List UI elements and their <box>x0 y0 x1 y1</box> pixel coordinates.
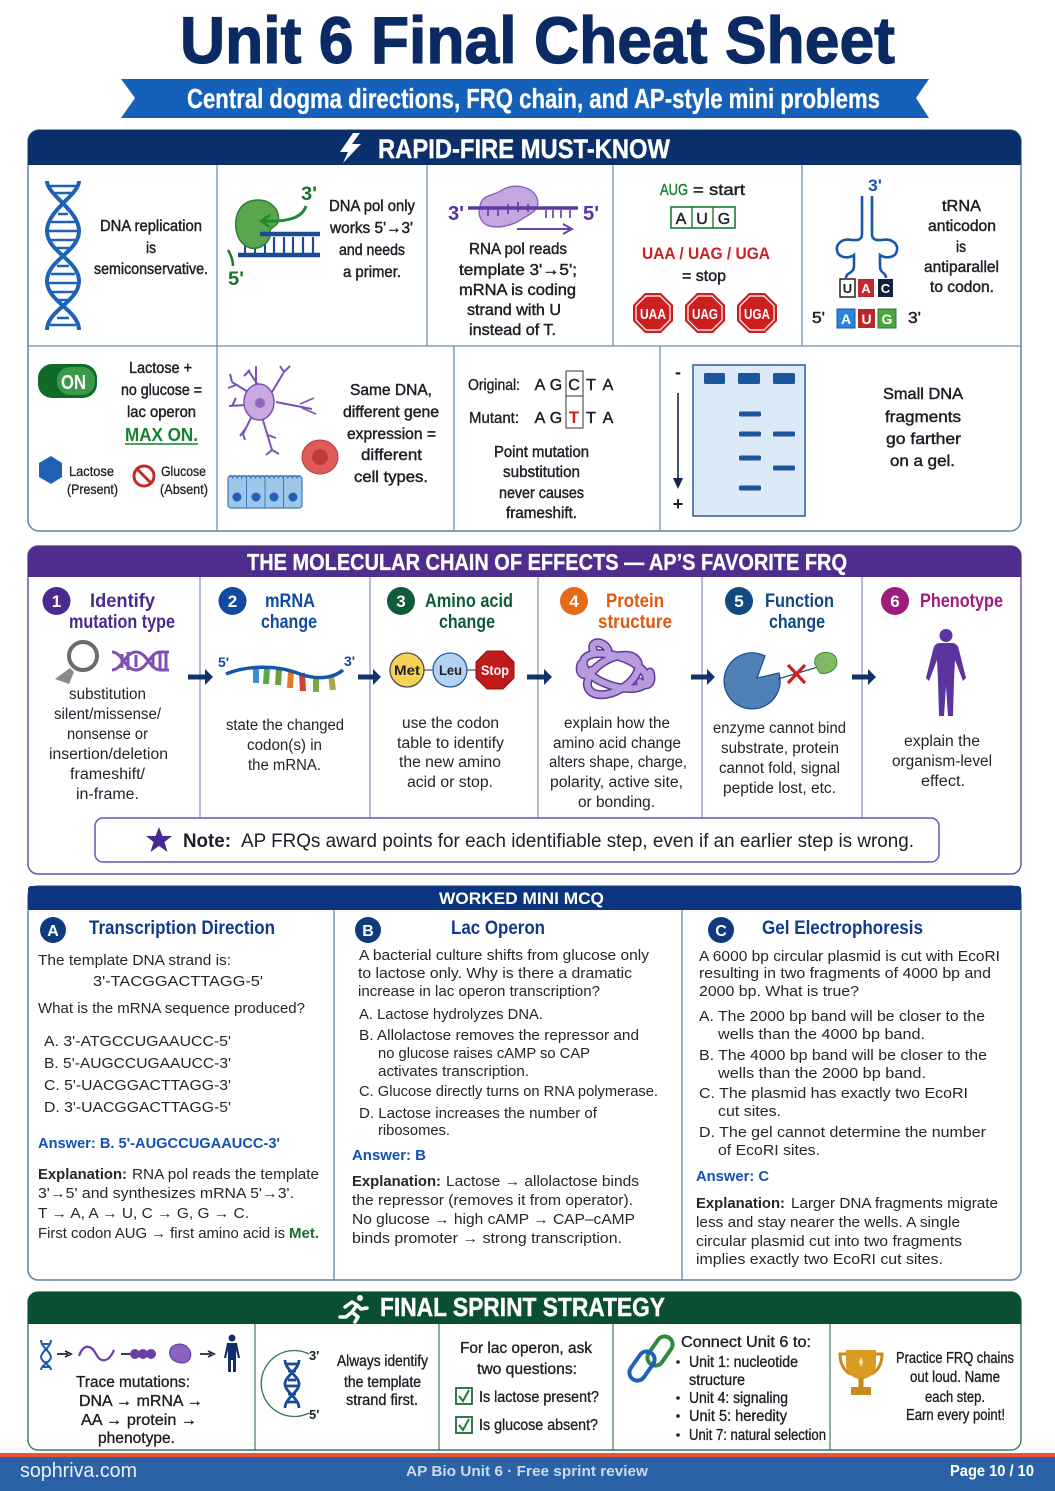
question B: lac operon: Explanation: <box>352 1174 441 1190</box>
question A: transcription direction: RNA pol reads the template <box>132 1167 319 1183</box>
panel: molecular chain of effects <box>28 546 1021 874</box>
question C: gel electrophoresis: Larger DNA fragments migrate <box>791 1196 998 1212</box>
arrow 2 <box>358 669 381 685</box>
icon: checkbox <box>456 1388 472 1404</box>
connect units cell: structure <box>689 1372 745 1389</box>
icon: cell types <box>228 366 338 508</box>
question A: transcription direction: Explanation: <box>38 1167 127 1183</box>
question C: gel electrophoresis <box>696 917 1000 1268</box>
text: RNA pol <box>459 241 577 339</box>
lactose present, glucose absent: (Absent) <box>160 481 208 497</box>
chain header <box>28 546 1021 577</box>
question B: lac operon: to lactose only. Why is there a dramatic <box>358 966 632 982</box>
icon: gel electrophoresis: - <box>675 362 681 382</box>
question C: gel electrophoresis: less and stay nearer the wells. A single <box>696 1215 960 1231</box>
icon: person <box>926 629 966 716</box>
step 4: protein structure: explain how the <box>564 715 670 732</box>
step 6: phenotype: effect. <box>921 773 965 790</box>
step 3: amino acid change: acid or stop. <box>407 774 493 791</box>
icon: DNA polymerase: 5' <box>228 269 244 290</box>
question A: transcription direction: D. 3'-UACGGACTTAGG-5' <box>44 1100 231 1116</box>
question C: gel electrophoresis: resulting in two fragments of 4000 bp and <box>699 966 991 982</box>
start and stop codons <box>633 182 777 333</box>
question A: transcription direction: Met. <box>289 1226 319 1242</box>
point mutation sequence comparison: G <box>550 377 562 394</box>
step 1: identify mutation type: nonsense or <box>67 726 148 743</box>
template strand cell: strand first. <box>346 1392 418 1409</box>
text: DNA pol <box>329 198 415 281</box>
question B: lac operon: B. Allolactose removes the repressor and <box>359 1028 639 1044</box>
text: lac operon: MAX ON. <box>125 425 198 445</box>
question C: gel electrophoresis: implies exactly two EcoRI cut sites. <box>696 1252 943 1268</box>
question C: gel electrophoresis: cut sites. <box>718 1104 781 1120</box>
chain header: THE MOLECULAR CHAIN OF EFFECTS — AP’S FAVORITE FRQ <box>247 549 847 575</box>
point mutation sequence comparison: C <box>568 377 580 394</box>
icon: DNA in ring <box>261 1348 319 1422</box>
text: DNA pol: DNA pol only <box>329 198 415 215</box>
icon: RNA polymerase: 3' <box>448 203 464 225</box>
icon: gel electrophoresis <box>673 362 805 516</box>
footer: Page 10 / 10 <box>950 1463 1034 1480</box>
step 5: function change: substrate, protein <box>721 740 839 757</box>
step 6: phenotype: Phenotype <box>920 591 1003 612</box>
icon: tRNA with codon: 3' <box>908 310 921 327</box>
question C: gel electrophoresis: circular plasmid cut into two fragments <box>696 1234 962 1250</box>
question B: lac operon: increase in lac operon transcription? <box>358 984 600 1000</box>
lac operon questions cell: two questions: <box>477 1361 577 1378</box>
connect units cell: Unit 4: signaling <box>689 1390 788 1407</box>
text: point mutation: frameshift. <box>506 505 577 522</box>
connect units cell: Unit 5: heredity <box>689 1408 787 1425</box>
trace mutations cell: phenotype. <box>98 1430 175 1447</box>
panel: rapid-fire must-know <box>28 130 1021 531</box>
arrow 5 <box>852 669 876 685</box>
icon: gel electrophoresis: + <box>673 494 683 514</box>
step 5: function change: peptide lost, etc. <box>723 780 836 797</box>
step 6: phenotype <box>881 587 1003 790</box>
icon: folded protein <box>579 643 651 703</box>
text: gene expression <box>343 382 439 486</box>
text: gene expression: Same DNA, <box>350 382 432 399</box>
template strand cell: the template <box>344 1374 421 1391</box>
text: gel: Small DNA <box>883 386 963 403</box>
arrow 4 <box>691 669 715 685</box>
text: tRNA: to codon. <box>930 279 994 296</box>
icon: tRNA with codon: A <box>861 281 871 296</box>
text: gene expression: expression = <box>347 426 436 443</box>
step 1: identify mutation type: Identify <box>90 591 155 612</box>
question C: gel electrophoresis: C <box>715 923 727 940</box>
question B: lac operon: A bacterial culture shifts from glucose only <box>359 948 650 964</box>
practice cell <box>840 1350 1014 1424</box>
question C: gel electrophoresis: C. The plasmid has exactly two EcoRI <box>699 1086 968 1102</box>
rapid-fire header <box>28 130 1021 165</box>
step 5: function change: change <box>769 612 825 633</box>
icon: DNA polymerase: 3' <box>301 184 317 205</box>
question A: transcription direction: The template DNA strand is: <box>38 953 231 969</box>
step 6: phenotype: organism-level <box>892 753 992 770</box>
step 2: mRNA change: change <box>261 612 317 633</box>
question C: gel electrophoresis: Gel Electrophoresis <box>762 918 923 939</box>
sprint header: FINAL SPRINT STRATEGY <box>380 1292 665 1322</box>
icon: mRNA strand <box>218 653 355 692</box>
question B: lac operon: Lac Operon <box>451 918 545 939</box>
subtitle ribbon: Central dogma directions, FRQ chain, and AP-style mini problems <box>187 83 880 114</box>
point mutation sequence comparison: T <box>586 410 596 427</box>
lactose present, glucose absent <box>39 456 208 497</box>
lactose present, glucose absent: Lactose <box>69 463 114 479</box>
text: replication: semiconservative. <box>94 261 208 278</box>
text: tRNA: tRNA <box>942 198 981 215</box>
stop signs: UAA <box>640 306 666 323</box>
panel: final sprint strategy <box>28 1292 1021 1450</box>
question B: lac operon: ribosomes. <box>378 1123 450 1139</box>
step 6: phenotype: 6 <box>890 592 900 611</box>
icon: tRNA with codon: 5' <box>812 310 825 327</box>
step 2: mRNA change <box>218 587 355 774</box>
text: gene expression: different <box>361 447 423 464</box>
question A: transcription direction <box>38 917 319 1242</box>
question A: transcription direction: First codon AUG → first amino acid is <box>38 1226 285 1242</box>
icon: tRNA with codon: 3' <box>868 176 882 195</box>
step 2: mRNA change: mRNA <box>265 591 315 612</box>
step 2: mRNA change: state the changed <box>226 717 344 734</box>
question B: lac operon: no glucose raises cAMP so CAP <box>378 1046 590 1062</box>
stop signs <box>633 293 777 333</box>
point mutation sequence comparison <box>468 371 614 428</box>
question B: lac operon: the repressor (removes it from operator). <box>352 1193 633 1209</box>
icon: RNA polymerase <box>448 186 599 234</box>
text: gene expression: cell types. <box>354 469 428 486</box>
point mutation sequence comparison: A <box>535 377 546 394</box>
text: gel: go farther <box>886 431 962 448</box>
step 4: protein structure: Protein <box>606 591 664 612</box>
icon: DNA helix <box>47 181 79 330</box>
note callout <box>95 818 939 862</box>
step 1: identify mutation type: insertion/deletion <box>49 746 168 763</box>
step 1: identify mutation type: mutation type <box>69 612 175 633</box>
question A: transcription direction: A <box>47 923 59 940</box>
text: tRNA: anticodon <box>928 218 996 235</box>
practice cell: each step. <box>925 1389 985 1406</box>
text: replication <box>94 218 208 278</box>
icon: DNA polymerase <box>228 184 320 290</box>
start and stop codons: UAA / UAG / UGA <box>642 244 770 263</box>
point mutation sequence comparison: T <box>569 408 580 427</box>
question C: gel electrophoresis: D. The gel cannot determine the number <box>699 1125 986 1141</box>
step 5: function change <box>713 587 846 797</box>
text: point mutation: never causes <box>499 485 584 502</box>
step 4: protein structure: polarity, active site, <box>550 774 683 791</box>
step 5: function change: 5 <box>734 592 744 611</box>
AUG codon boxes <box>671 207 735 228</box>
template strand cell: Always identify <box>337 1353 428 1370</box>
question C: gel electrophoresis: wells than the 2000 bp band. <box>717 1066 926 1082</box>
text: replication: is <box>146 240 156 257</box>
footer <box>0 1453 1055 1491</box>
point mutation sequence comparison: A <box>603 410 614 427</box>
step 2: mRNA change: codon(s) in <box>247 737 322 754</box>
text: point mutation: Point mutation <box>494 444 589 461</box>
rapid-fire header: RAPID-FIRE MUST-KNOW <box>378 134 670 164</box>
step 3: amino acid change: Amino acid <box>425 591 513 612</box>
icon: RNA polymerase: 5' <box>583 203 599 225</box>
step 5: function change: cannot fold, signal <box>719 760 840 777</box>
question A: transcription direction: T → A, A → U, C → G, G → C. <box>38 1206 249 1222</box>
question B: lac operon: Answer: B <box>352 1148 426 1164</box>
question A: transcription direction: Answer: B. 5'-AUGCCUGAAUCC-3' <box>38 1136 280 1152</box>
start and stop codons: AUG <box>660 182 688 199</box>
question C: gel electrophoresis: B. The 4000 bp band will be closer to the <box>699 1048 987 1064</box>
question A: transcription direction: Transcription Direction <box>89 918 275 939</box>
arrow 3 <box>527 669 552 685</box>
text: RNA pol: RNA pol reads <box>469 241 567 258</box>
lac operon questions cell: For lac operon, ask <box>460 1340 592 1357</box>
connect units cell: Unit 1: nucleotide <box>689 1354 798 1371</box>
icon: star <box>146 827 172 852</box>
icon: amino acid chain: Stop <box>481 662 509 678</box>
icon: tRNA with codon: U <box>843 281 852 296</box>
step 3: amino acid change: 3 <box>396 592 406 611</box>
connect units cell <box>626 1333 826 1444</box>
step 1: identify mutation type: substitution <box>69 686 146 703</box>
question C: gel electrophoresis: wells than the 4000 bp band. <box>717 1027 925 1043</box>
point mutation sequence comparison: T <box>586 377 596 394</box>
step 1: identify mutation type: in-frame. <box>76 786 139 803</box>
start and stop codons: = start <box>693 182 746 199</box>
question B: lac operon: A. Lactose hydrolyzes DNA. <box>359 1007 543 1023</box>
text: lac operon <box>121 360 202 445</box>
AUG codon boxes: U <box>696 211 708 228</box>
trace mutations cell: AA → protein → <box>81 1412 197 1429</box>
question A: transcription direction: C. 5'-UACGGACTTAGG-3' <box>44 1078 231 1094</box>
practice cell: Practice FRQ chains <box>896 1350 1014 1367</box>
arrow 1 <box>188 669 213 685</box>
step 4: protein structure: structure <box>598 612 672 633</box>
note callout: AP FRQs award points for each identifiable step, even if an earlier step is wrong. <box>241 831 914 852</box>
text: point mutation: substitution <box>503 464 580 481</box>
icon: checkbox <box>456 1417 472 1433</box>
icon: DNA to phenotype chain <box>41 1334 240 1372</box>
text: gene expression: different gene <box>343 404 439 421</box>
step 4: protein structure <box>549 587 687 811</box>
icon: ON switch <box>38 364 97 398</box>
question A: transcription direction: B. 5'-AUGCCUGAAUCC-3' <box>44 1056 231 1072</box>
trace mutations cell: DNA → mRNA → <box>79 1393 203 1410</box>
point mutation sequence comparison: G <box>550 410 562 427</box>
text: RNA pol: template 3'→5'; <box>459 262 577 279</box>
question B: lac operon: C. Glucose directly turns on RNA polymerase. <box>359 1084 658 1100</box>
lac operon questions cell <box>456 1340 599 1434</box>
icon: chain link <box>626 1333 676 1384</box>
text: tRNA: antiparallel <box>924 259 999 276</box>
question C: gel electrophoresis: Explanation: <box>696 1196 785 1212</box>
question C: gel electrophoresis: A 6000 bp circular plasmid is cut with EcoRI <box>699 949 1000 965</box>
question C: gel electrophoresis: A. The 2000 bp band will be closer to the <box>699 1009 985 1025</box>
question A: transcription direction: What is the mRNA sequence produced? <box>38 1001 305 1017</box>
lac operon questions cell: Is glucose absent? <box>479 1417 598 1434</box>
point mutation sequence comparison: Original: <box>468 377 520 394</box>
text: tRNA: is <box>956 239 966 256</box>
question A: transcription direction: A. 3'-ATGCCUGAAUCC-5' <box>44 1034 231 1050</box>
trace mutations cell: Trace mutations: <box>76 1374 190 1391</box>
question B: lac operon: Lactose → allolactose binds <box>446 1174 639 1190</box>
practice cell: Earn every point! <box>906 1407 1005 1424</box>
stop signs: UGA <box>744 306 770 323</box>
practice cell: out loud. Name <box>910 1369 1000 1386</box>
question A: transcription direction: 3'→5' and synthesizes mRNA 5'→3'. <box>38 1186 294 1202</box>
question A: transcription direction: 3'-TACGGACTTAGG-5' <box>93 974 263 990</box>
text: lac operon: Lactose + <box>129 360 192 377</box>
connect units cell: Unit 7: natural selection <box>689 1427 826 1444</box>
note callout: Note: <box>183 831 231 852</box>
icon: tRNA with codon: C <box>881 281 891 296</box>
icon: lightning bolt <box>340 133 361 163</box>
question B: lac operon: activates transcription. <box>378 1064 529 1080</box>
step 4: protein structure: or bonding. <box>578 794 655 811</box>
question C: gel electrophoresis: of EcoRI sites. <box>718 1143 820 1159</box>
point mutation sequence comparison: A <box>535 410 546 427</box>
template strand cell <box>261 1348 428 1422</box>
question B: lac operon: B <box>362 923 374 940</box>
step 3: amino acid change <box>387 587 514 791</box>
step 3: amino acid change: the new amino <box>399 754 501 771</box>
icon: mRNA strand: 3' <box>344 653 355 669</box>
text: RNA pol: mRNA is coding <box>459 282 576 299</box>
subtitle ribbon <box>121 79 929 118</box>
question B: lac operon: binds promoter → strong transcription. <box>352 1231 622 1247</box>
MCQ header: WORKED MINI MCQ <box>439 889 604 908</box>
lactose present, glucose absent: Glucose <box>161 463 206 479</box>
question B: lac operon: D. Lactose increases the number of <box>359 1106 598 1122</box>
icon: amino acid chain: Leu <box>439 662 462 678</box>
text: DNA pol: a primer. <box>343 264 401 281</box>
text: DNA pol: and needs <box>339 242 405 259</box>
icon: magnifier and DNA <box>55 642 169 684</box>
text: tRNA <box>924 198 999 296</box>
lac operon questions cell: Is lactose present? <box>479 1389 599 1406</box>
step 2: mRNA change: the mRNA. <box>248 757 321 774</box>
AUG codon boxes: A <box>676 211 687 228</box>
text: point mutation <box>494 444 589 522</box>
stop signs: UAG <box>692 306 718 323</box>
icon: enzyme cannot bind substrate <box>724 652 837 709</box>
point mutation sequence comparison: Mutant: <box>469 410 519 427</box>
text: gel: fragments <box>885 409 961 426</box>
sprint header <box>28 1292 1021 1324</box>
question B: lac operon <box>352 917 658 1247</box>
trace mutations cell <box>41 1334 240 1447</box>
step 4: protein structure: amino acid change <box>553 735 681 752</box>
question B: lac operon: No glucose → high cAMP → CAP–cAMP <box>352 1212 635 1228</box>
icon: trophy <box>840 1350 882 1395</box>
icon: amino acid chain <box>390 651 514 689</box>
icon: tRNA with codon <box>812 176 921 328</box>
icon: tRNA with codon: A <box>841 311 851 327</box>
icon: tRNA with codon: G <box>882 311 893 327</box>
icon: mRNA strand: 5' <box>218 654 229 670</box>
step 5: function change: enzyme cannot bind <box>713 720 846 737</box>
step 1: identify mutation type: silent/missense/ <box>54 706 162 723</box>
step 6: phenotype: explain the <box>904 733 980 750</box>
question C: gel electrophoresis: Answer: C <box>696 1169 770 1185</box>
title: Unit 6 Final Cheat Sheet <box>180 3 895 77</box>
icon: tRNA with codon: U <box>861 311 872 327</box>
text: RNA pol: strand with U <box>467 302 561 319</box>
step 2: mRNA change: 2 <box>228 592 237 611</box>
icon: DNA in ring: 3' <box>309 1348 319 1363</box>
point mutation sequence comparison: A <box>603 377 614 394</box>
text: lac operon: lac operon <box>127 404 196 421</box>
step 1: identify mutation type: frameshift/ <box>70 766 146 783</box>
text: lac operon: no glucose = <box>121 382 202 399</box>
step 3: amino acid change: change <box>439 612 495 633</box>
text: RNA pol: instead of T. <box>469 322 556 339</box>
step 1: identify mutation type <box>42 587 175 803</box>
question C: gel electrophoresis: 2000 bp. What is true? <box>699 984 859 1000</box>
step 5: function change: Function <box>765 591 834 612</box>
MCQ header <box>28 886 1021 910</box>
footer: AP Bio Unit 6 · Free sprint review <box>406 1463 648 1480</box>
icon: runner <box>340 1295 367 1322</box>
text: gel: on a gel. <box>890 453 955 470</box>
icon: amino acid chain: Met <box>394 662 420 678</box>
text: DNA pol: works 5'→3' <box>329 220 413 237</box>
step 3: amino acid change: use the codon <box>402 715 499 732</box>
step 3: amino acid change: table to identify <box>397 735 504 752</box>
footer: sophriva.com <box>20 1460 137 1482</box>
lactose present, glucose absent: (Present) <box>67 481 118 497</box>
text: replication: DNA replication <box>100 218 202 235</box>
step 4: protein structure: alters shape, charge, <box>549 754 687 771</box>
text: gel <box>883 386 963 470</box>
step 4: protein structure: 4 <box>569 592 579 611</box>
step 1: identify mutation type: 1 <box>52 592 61 611</box>
icon: DNA in ring: 5' <box>309 1407 319 1422</box>
AUG codon boxes: G <box>718 211 730 228</box>
connect units cell: Connect Unit 6 to: <box>681 1334 811 1351</box>
start and stop codons: = stop <box>682 268 726 285</box>
panel: worked mini MCQ <box>28 886 1021 1280</box>
icon: ON switch: ON <box>61 372 86 394</box>
